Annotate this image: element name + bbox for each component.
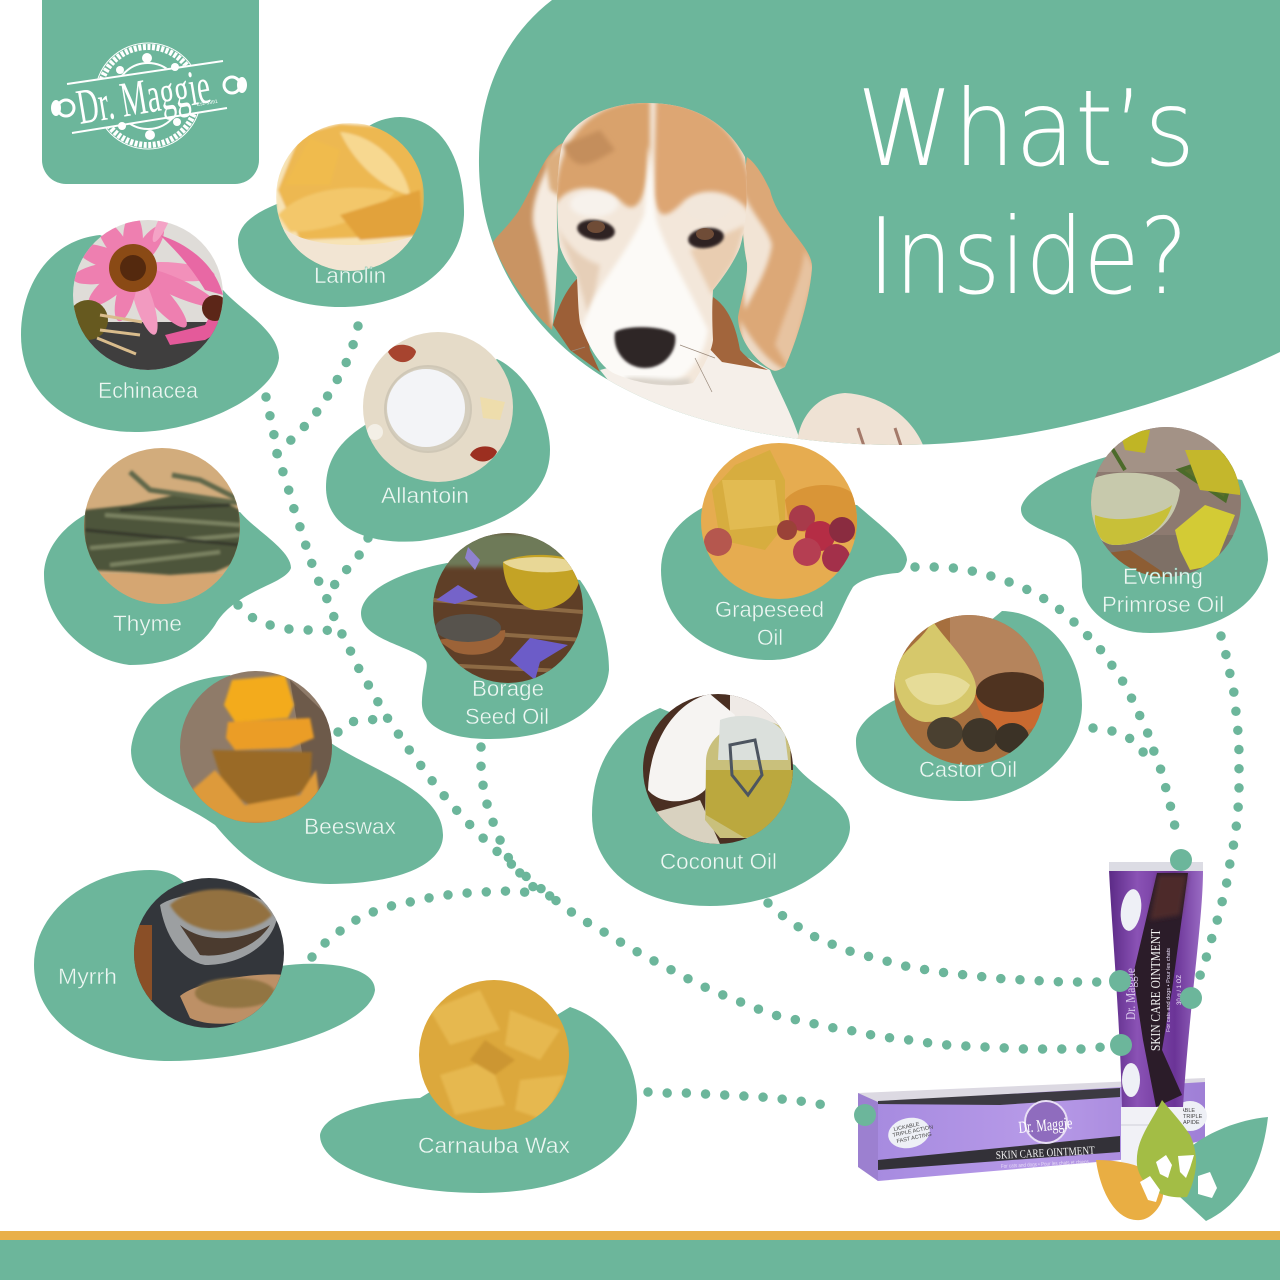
primrose blob	[1021, 457, 1268, 633]
connector: thyme	[238, 605, 342, 634]
connector: primrose	[1198, 636, 1239, 981]
product: box and tube: APIDE	[1183, 1120, 1200, 1126]
castor photo	[894, 615, 1048, 765]
left ear	[493, 143, 563, 330]
connector: grapeseed	[915, 567, 1178, 841]
panel: castor oil	[856, 611, 1082, 801]
tube dark stripe	[1133, 873, 1188, 1107]
echinacea blob	[21, 235, 279, 432]
borage label: Borage	[472, 676, 544, 701]
head tan left	[555, 100, 650, 207]
orange leaf	[1096, 1160, 1163, 1220]
panel: borage seed oil	[361, 533, 609, 739]
connector: borage	[481, 747, 550, 896]
echinacea petals	[74, 220, 215, 335]
footer orange stripe	[0, 1231, 1280, 1240]
allantoin blob	[326, 359, 550, 542]
thyme photo	[84, 448, 242, 604]
tube crimp	[1109, 862, 1203, 871]
connector: carnauba	[648, 1092, 838, 1108]
castor label: Castor Oil	[919, 757, 1017, 782]
connector: echinacea	[266, 397, 1102, 1049]
box top	[858, 1078, 1205, 1105]
connector: coconut	[768, 903, 1102, 982]
dotted connectors	[238, 326, 1239, 1108]
box burst badge	[885, 1114, 933, 1152]
carnauba label: Carnauba Wax	[418, 1133, 570, 1158]
product: box and tube: For cats and dogs • Pour les chats et chiens	[1001, 1159, 1089, 1170]
echinacea photo	[73, 220, 223, 370]
beeswax blob	[131, 675, 443, 884]
tube body	[1109, 870, 1203, 1107]
connector: beeswax	[338, 719, 383, 732]
myrrh blob	[34, 870, 375, 1061]
paw	[797, 393, 923, 445]
lanolin label: Lanolin	[314, 263, 386, 288]
panel: allantoin	[326, 332, 550, 542]
panel: coconut oil	[592, 694, 850, 906]
beeswax label: Beeswax	[304, 814, 396, 839]
tube logo: Dr. Maggie	[1124, 968, 1139, 1020]
lanolin photo	[276, 123, 424, 271]
title line 2: Inside?	[868, 196, 1188, 318]
lower cheek right	[690, 225, 745, 295]
allantoin photo	[363, 332, 513, 482]
connector: myrrh	[312, 891, 541, 957]
tube label: SKIN CARE OINTMENT	[1149, 929, 1164, 1051]
myrrh label: Myrrh	[58, 964, 117, 989]
grapeseed label: Grapeseed	[715, 597, 824, 622]
product: box and tube: FAST ACTING	[896, 1132, 932, 1145]
nose	[615, 327, 675, 368]
neck right	[706, 297, 768, 370]
coconut blob	[592, 708, 850, 906]
beeswax photo	[180, 671, 332, 823]
right brow	[686, 196, 730, 220]
head tan right	[654, 100, 752, 215]
box right badge	[1173, 1101, 1207, 1131]
left brow	[570, 191, 618, 217]
chest	[600, 350, 800, 439]
logo emblem ring	[99, 47, 197, 145]
grapeseed photo	[701, 443, 857, 599]
box title: SKIN CARE OINTMENT	[996, 1145, 1095, 1162]
primrose label: Evening	[1123, 564, 1203, 589]
panel: beeswax	[131, 671, 443, 884]
box band bottom	[878, 1136, 1120, 1170]
primrose photo	[1091, 427, 1241, 577]
logo panel	[42, 0, 259, 184]
allantoin label: Allantoin	[381, 483, 469, 508]
title line 1: What’s	[857, 68, 1195, 190]
panel: lanolin	[238, 117, 464, 307]
panel: borage seed oil: Seed Oil	[465, 704, 549, 729]
product: box and tube: 30 g / 1 OZ	[1177, 975, 1183, 1005]
logo band	[67, 60, 227, 133]
logo wordmark: Dr. Maggie	[73, 58, 214, 135]
connector: lanolin	[277, 326, 358, 454]
panel: evening primrose oil	[1021, 427, 1268, 633]
left eye	[576, 217, 616, 243]
panel: myrrh	[34, 870, 375, 1061]
product: box and tube: Dr. Maggie	[1018, 1113, 1073, 1137]
neck left	[553, 278, 600, 372]
panel: thyme	[44, 448, 291, 665]
myrrh photo	[134, 878, 284, 1028]
logo panel: Est. 1991	[196, 99, 218, 108]
dog illustration	[485, 100, 923, 446]
lime leaf	[1137, 1100, 1196, 1197]
whiskers	[572, 345, 715, 392]
borage blob	[361, 563, 609, 739]
right ear	[738, 157, 812, 371]
borage photo	[433, 533, 583, 683]
teal leaf	[1180, 1117, 1268, 1221]
castor blob	[856, 611, 1082, 801]
logo background	[42, 0, 259, 184]
box front	[878, 1082, 1205, 1181]
tube badges	[1118, 888, 1144, 932]
thyme label: Thyme	[113, 611, 182, 636]
logo flourishes	[51, 53, 247, 140]
echinacea label: Echinacea	[98, 378, 199, 403]
product: box and tube: TRIPLE	[1183, 1114, 1203, 1120]
box logo	[1025, 1101, 1067, 1143]
product: box and tube: For cats and dogs • Pour les chats	[1166, 948, 1172, 1032]
panel: carnauba wax	[320, 980, 637, 1193]
upper head darker	[563, 130, 615, 164]
carnauba blob	[320, 1007, 637, 1193]
panel: grapeseed oil	[661, 443, 907, 660]
grapeseed blob	[661, 505, 907, 660]
product: box and tube: TRIPLE ACTION	[892, 1125, 934, 1139]
white blaze	[582, 145, 708, 390]
product: box and tube: ABLE	[1181, 1108, 1195, 1114]
connector end points	[854, 849, 1202, 1126]
tube cap	[1121, 1107, 1183, 1170]
lanolin blob	[238, 117, 464, 307]
title	[857, 68, 1195, 318]
lower cheek left	[560, 232, 601, 312]
header green blob	[479, 0, 1280, 445]
connector: castor	[1093, 728, 1145, 754]
right eye	[687, 226, 725, 250]
panel: echinacea	[21, 200, 279, 432]
box band top	[878, 1088, 1120, 1105]
head	[550, 100, 755, 390]
footer green bar	[0, 1240, 1280, 1280]
panel: evening primrose oil: Primrose Oil	[1102, 592, 1224, 617]
carnauba photo	[419, 980, 569, 1130]
panel: grapeseed oil: Oil	[757, 625, 783, 650]
product: box and tube: LICKABLE	[893, 1122, 920, 1133]
thyme blob	[44, 510, 291, 665]
logo paws	[142, 53, 152, 63]
product: box and tube	[858, 862, 1207, 1181]
connector: allantoin	[327, 538, 368, 599]
paw pads	[1140, 1155, 1217, 1202]
box end flap	[858, 1093, 878, 1181]
tube highlight	[1150, 875, 1187, 920]
coconut photo	[643, 694, 793, 844]
coconut label: Coconut Oil	[660, 849, 777, 874]
leaf paw emblem	[1096, 1100, 1268, 1221]
